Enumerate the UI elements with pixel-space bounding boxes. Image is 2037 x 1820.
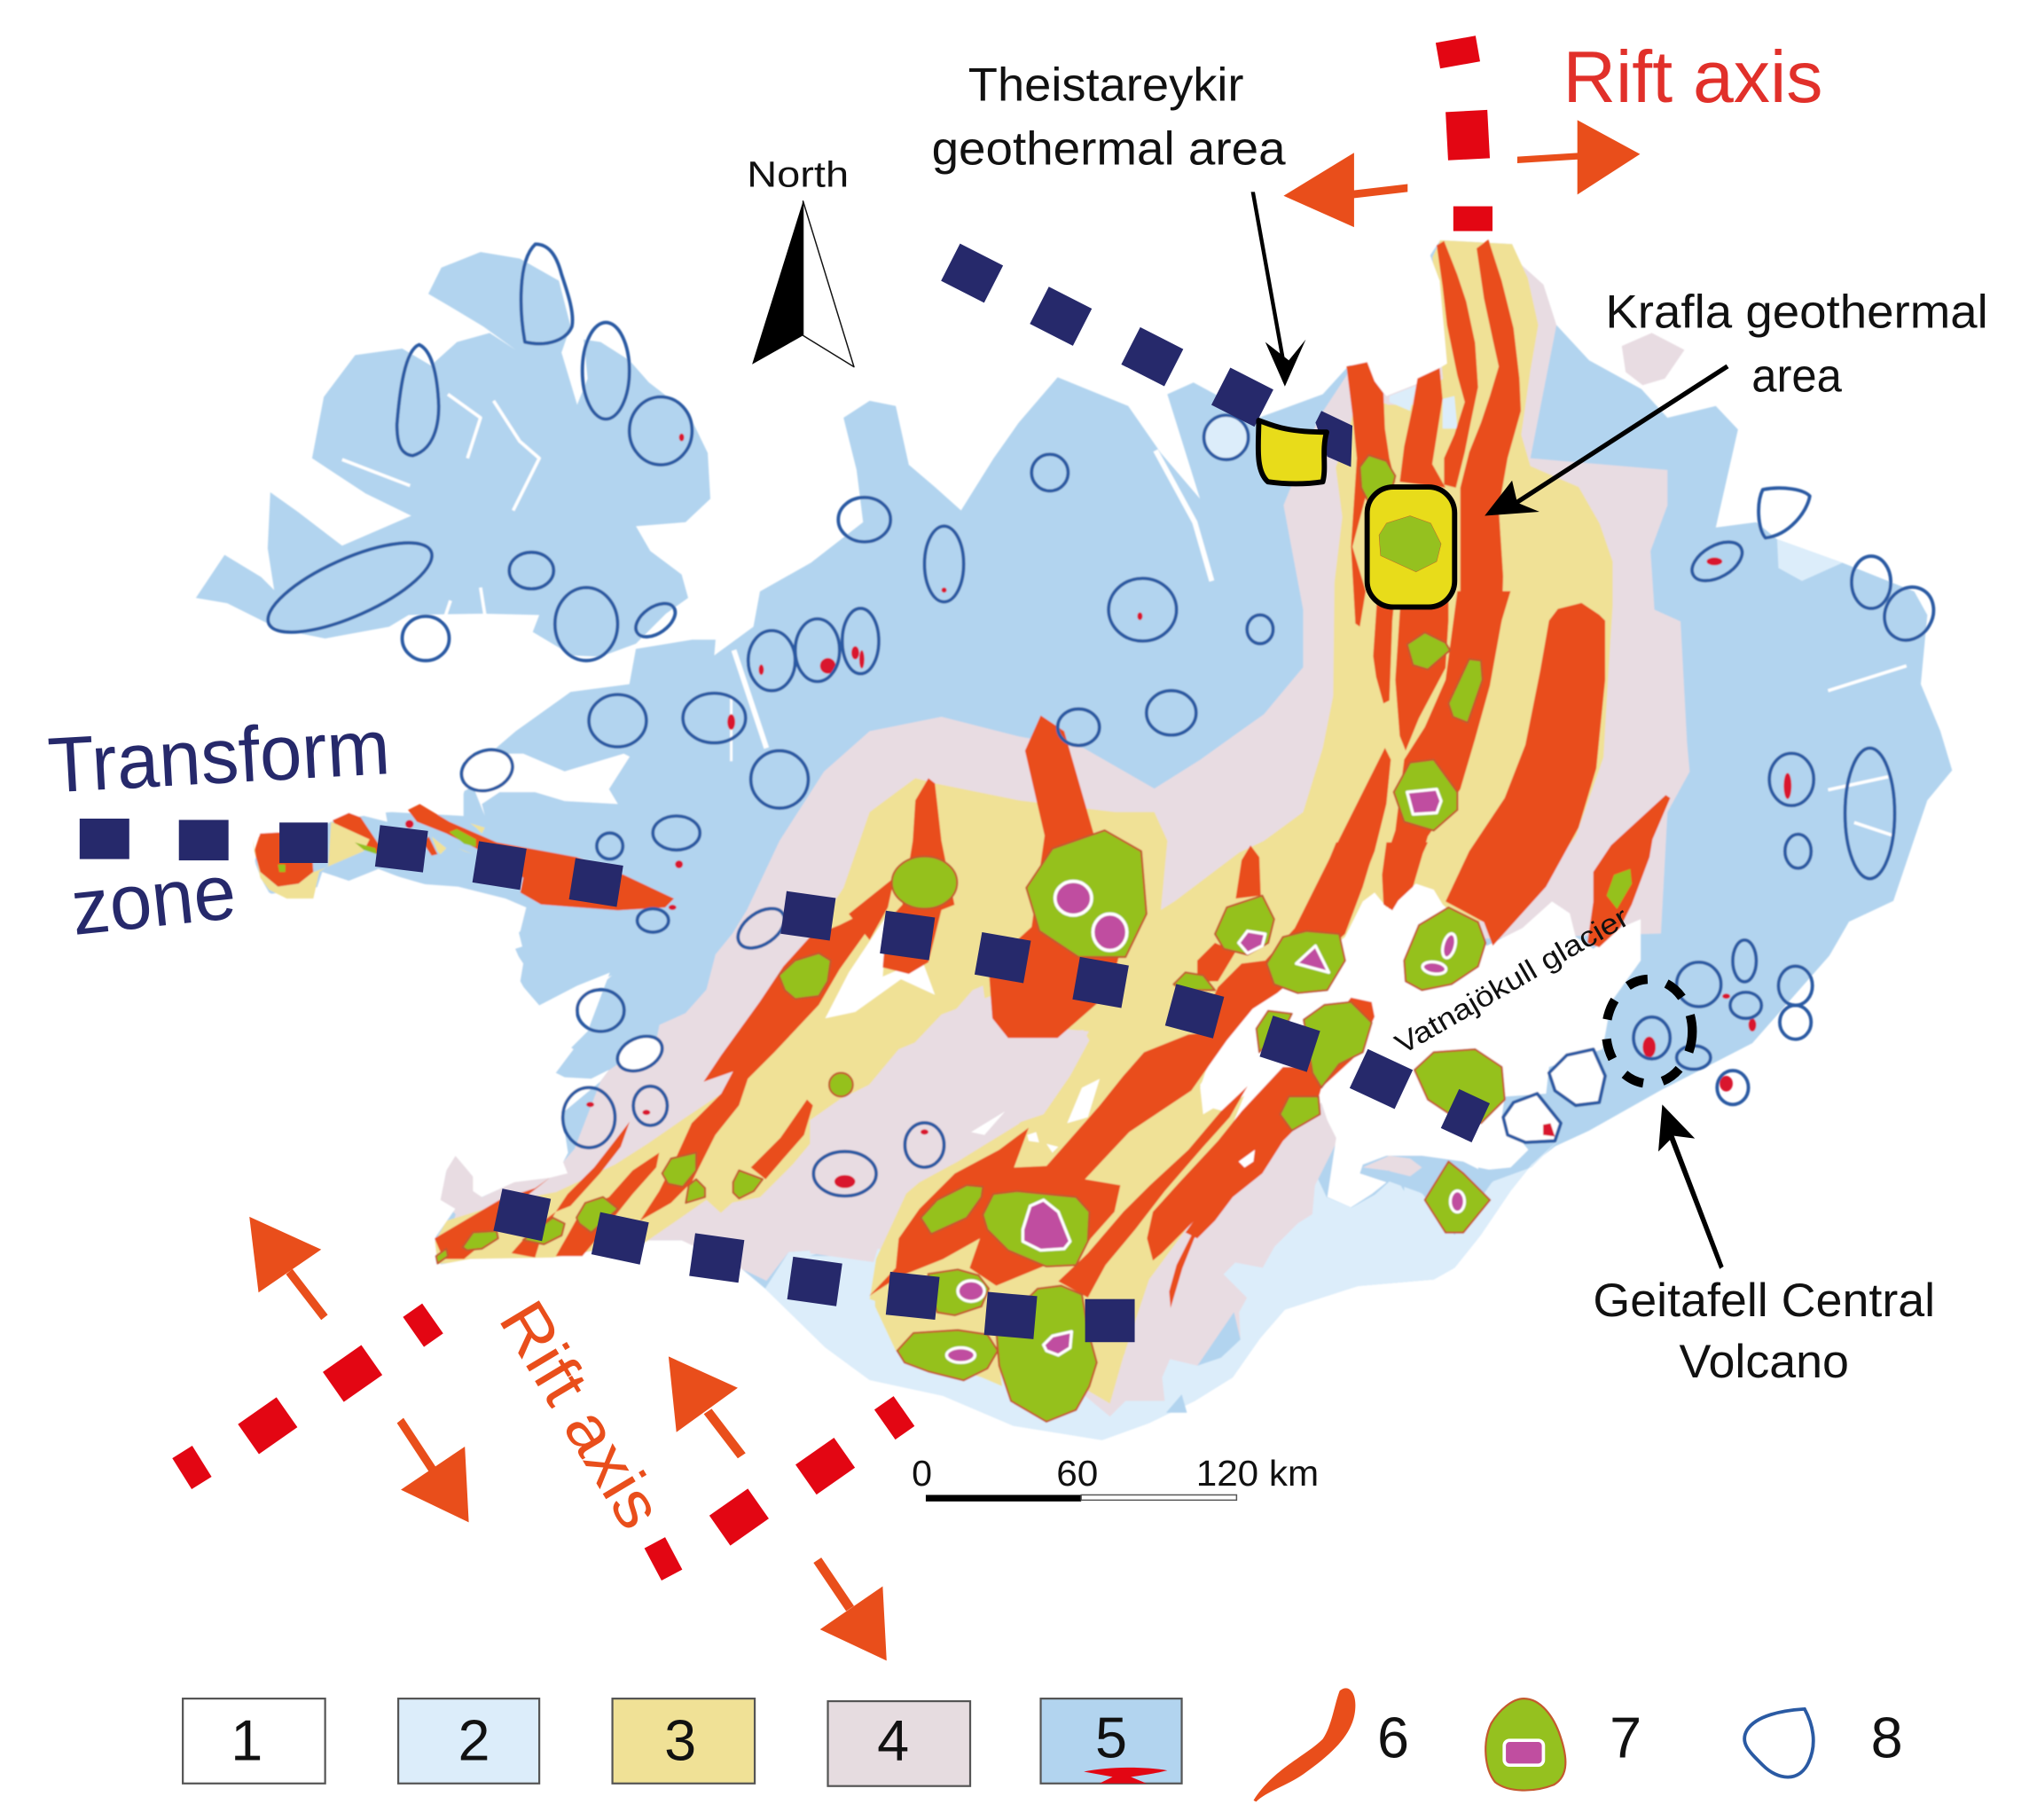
pink islet in the north-east bay <box>1622 333 1684 385</box>
north arrow black half <box>752 201 803 365</box>
scale labels: 0 <box>912 1453 932 1494</box>
label: Geitafell Central Volcano: Volcano <box>1680 1336 1849 1388</box>
black arrow to Theistareykir <box>1251 192 1305 387</box>
unit 5: small red rhyolite outcrops <box>482 434 1791 1188</box>
label: Rift axis, south-west: Rift axis <box>485 1288 678 1541</box>
legend 8: blue outline <box>1744 1705 1903 1777</box>
label: Transform zone: Transform <box>45 702 392 809</box>
scale bar <box>912 1453 1319 1502</box>
unit 8: blue outlines of Tertiary volcanoes <box>257 244 1943 1196</box>
north rift axis red dashes <box>1436 35 1492 231</box>
scale labels: 120 km <box>1196 1453 1319 1494</box>
label: Theistareykir geothermal area: Theistareykir <box>968 59 1243 111</box>
fjord details <box>342 395 1907 835</box>
pale sand lobe south of the wedge <box>875 1265 1002 1386</box>
label: Theistareykir geothermal area <box>932 59 1286 175</box>
legend 2: pale blue <box>398 1698 539 1784</box>
label: Transform zone: zone <box>67 847 239 952</box>
legend 4: pink <box>828 1701 970 1786</box>
scale labels <box>912 1453 1319 1494</box>
legend 6: orange fissure: 6 <box>1377 1705 1409 1769</box>
scale labels: 60 <box>1056 1453 1098 1494</box>
unit 4: pink Pleistocene area <box>440 244 1689 1416</box>
scale bar white segment <box>1081 1494 1236 1500</box>
spreading arrows at south-west rift 2 <box>669 1356 887 1660</box>
south-west rift axis red dashes 1 <box>172 1304 443 1489</box>
label: Theistareykir geothermal area: geothermal area <box>932 122 1286 175</box>
spreading arrows at north rift <box>1283 120 1640 227</box>
north coast near Oxarfjordur <box>1315 222 1447 396</box>
unit 7: green central volcanoes <box>436 455 1632 1422</box>
legend 1: white <box>183 1698 325 1784</box>
Snaefellsnes coast <box>239 754 526 976</box>
Snaefellsnes yellow deposits <box>253 820 485 898</box>
legend 2: pale blue: 2 <box>458 1707 490 1772</box>
transform zone: navy dashed line in the north <box>941 244 1352 467</box>
label: Geitafell Central Volcano: Geitafell Central <box>1593 1275 1935 1327</box>
legend 4: pink: 4 <box>877 1707 909 1772</box>
legend 8: blue outline: 8 <box>1871 1705 1903 1769</box>
north arrow white half <box>803 201 854 367</box>
legend 1: white: 1 <box>231 1707 262 1772</box>
Krafla geothermal area in yellow <box>1367 487 1454 607</box>
transform zone: navy dashed line along the south <box>493 1188 1135 1342</box>
white overlays that shape the coast <box>239 222 1447 1348</box>
unit 6: orange fissure swarms <box>255 239 1670 1308</box>
slit of ice in the southern strip <box>1239 1149 1255 1167</box>
central volcano feeder north of Hofsjokull <box>989 716 1123 1038</box>
label: North: North <box>747 154 849 194</box>
bay north of Snaefellsnes <box>461 754 630 816</box>
Theistareykir geothermal area in yellow <box>1258 420 1327 483</box>
scale bar black segment <box>926 1494 1081 1502</box>
spreading arrows at south-west rift 1 <box>249 1217 469 1522</box>
unit 2: pale blue sandur plains <box>765 539 1843 1440</box>
legend 7: green volcano: 7 <box>1610 1705 1641 1769</box>
unit 7: magenta silicic rock cores with white rim <box>946 789 1464 1362</box>
unit 3: yellow rift-zone deposits <box>435 240 1612 1403</box>
legend 7: green volcano <box>1485 1698 1641 1791</box>
legend 6: orange fissure <box>1254 1688 1409 1801</box>
Vatnajokull glacier in white <box>1200 883 1641 1207</box>
transform zone: navy dashed line across central Iceland <box>780 891 1490 1142</box>
label: Krafla geothermal area <box>1605 286 1988 403</box>
label: Geitafell Central Volcano <box>1593 1275 1935 1388</box>
label: Transform zone <box>45 702 392 952</box>
title: Rift axis, north: Rift axis <box>1563 36 1823 118</box>
pale flats at the north coast <box>1390 386 1457 428</box>
Faxafloi coast, south-west <box>366 905 822 1348</box>
yellow sand beside the southern volcano <box>1088 1298 1129 1391</box>
Geitafell dashed circle <box>1606 979 1692 1084</box>
Krafla central volcano <box>1379 516 1441 572</box>
rhyolite inside the coastal outline <box>1543 1123 1555 1136</box>
south-west rift axis red dashes 2 <box>645 1396 914 1581</box>
label: Vatnajokull glacier: Vatnajökull glacier <box>1390 900 1634 1060</box>
small blue patches on the south coast <box>810 1240 1241 1413</box>
north arrow <box>747 154 854 367</box>
Langjokull glacier in white <box>826 914 935 1018</box>
black arrow to Geitafell <box>1658 1104 1724 1269</box>
transform zone: navy dashed line across Snaefellsnes <box>80 819 623 906</box>
geological map of Iceland <box>196 222 1952 1440</box>
legend 5: blue with red outcrop <box>1041 1698 1182 1784</box>
legend 5: blue with red outcrop: 5 <box>1095 1705 1127 1769</box>
pink wedge between the rift zones <box>810 985 1089 1262</box>
black arrow to Krafla <box>1485 365 1729 515</box>
legend 3: yellow <box>613 1698 755 1784</box>
label: Krafla geothermal area: Krafla geothermal <box>1605 286 1988 338</box>
legend <box>183 1688 1903 1801</box>
Hofsjokull and small ice patches <box>971 993 1312 1153</box>
patchy land and ice south of the glacier <box>1363 1156 1492 1194</box>
label: Krafla geothermal area: area <box>1751 350 1842 403</box>
unit 5: Tertiary basalt land base <box>196 240 1952 1440</box>
legend 3: yellow: 3 <box>664 1707 696 1772</box>
